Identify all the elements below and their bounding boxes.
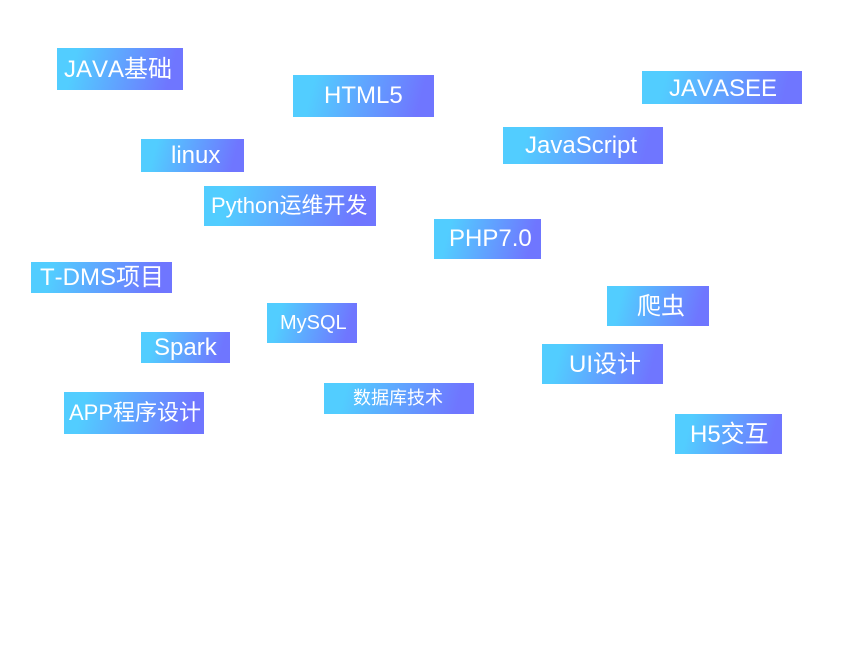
tag: MySQL — [267, 303, 357, 343]
tag: PHP7.0: PHP7.0 — [449, 225, 532, 252]
tag: JAVASEE: JAVASEE — [669, 74, 777, 102]
tag: UI设计 — [542, 344, 663, 384]
tag: UI设计: UI设计 — [569, 350, 641, 378]
tag: MySQL: MySQL — [280, 312, 347, 334]
tag: H5交互: H5交互 — [690, 420, 769, 448]
tag: T-DMS项目: T-DMS项目 — [40, 264, 164, 291]
tag: JAVA基础: JAVA基础 — [64, 56, 172, 82]
tag: 数据库技术: 数据库技术 — [353, 388, 443, 408]
tag: APP程序设计: APP程序设计 — [69, 400, 201, 425]
tag: JAVA基础 — [57, 48, 183, 90]
tag: PHP7.0 — [434, 219, 541, 259]
tag: 爬虫: 爬虫 — [637, 292, 685, 320]
tag: Python运维开发: Python运维开发 — [211, 193, 368, 218]
tag: 数据库技术 — [324, 383, 474, 414]
tag: HTML5 — [293, 75, 434, 117]
tag: 爬虫 — [607, 286, 709, 326]
tag: Python运维开发 — [204, 186, 376, 226]
tag: HTML5: HTML5 — [324, 82, 403, 109]
tag: linux: linux — [171, 142, 220, 168]
tag: linux — [141, 139, 244, 172]
tag: Spark — [141, 332, 230, 363]
tag: H5交互 — [675, 414, 782, 454]
tag: APP程序设计 — [64, 392, 204, 434]
tag: JavaScript: JavaScript — [525, 132, 637, 158]
tag: Spark: Spark — [154, 334, 217, 360]
tag: JAVASEE — [642, 71, 802, 104]
tag: JavaScript — [503, 127, 663, 164]
